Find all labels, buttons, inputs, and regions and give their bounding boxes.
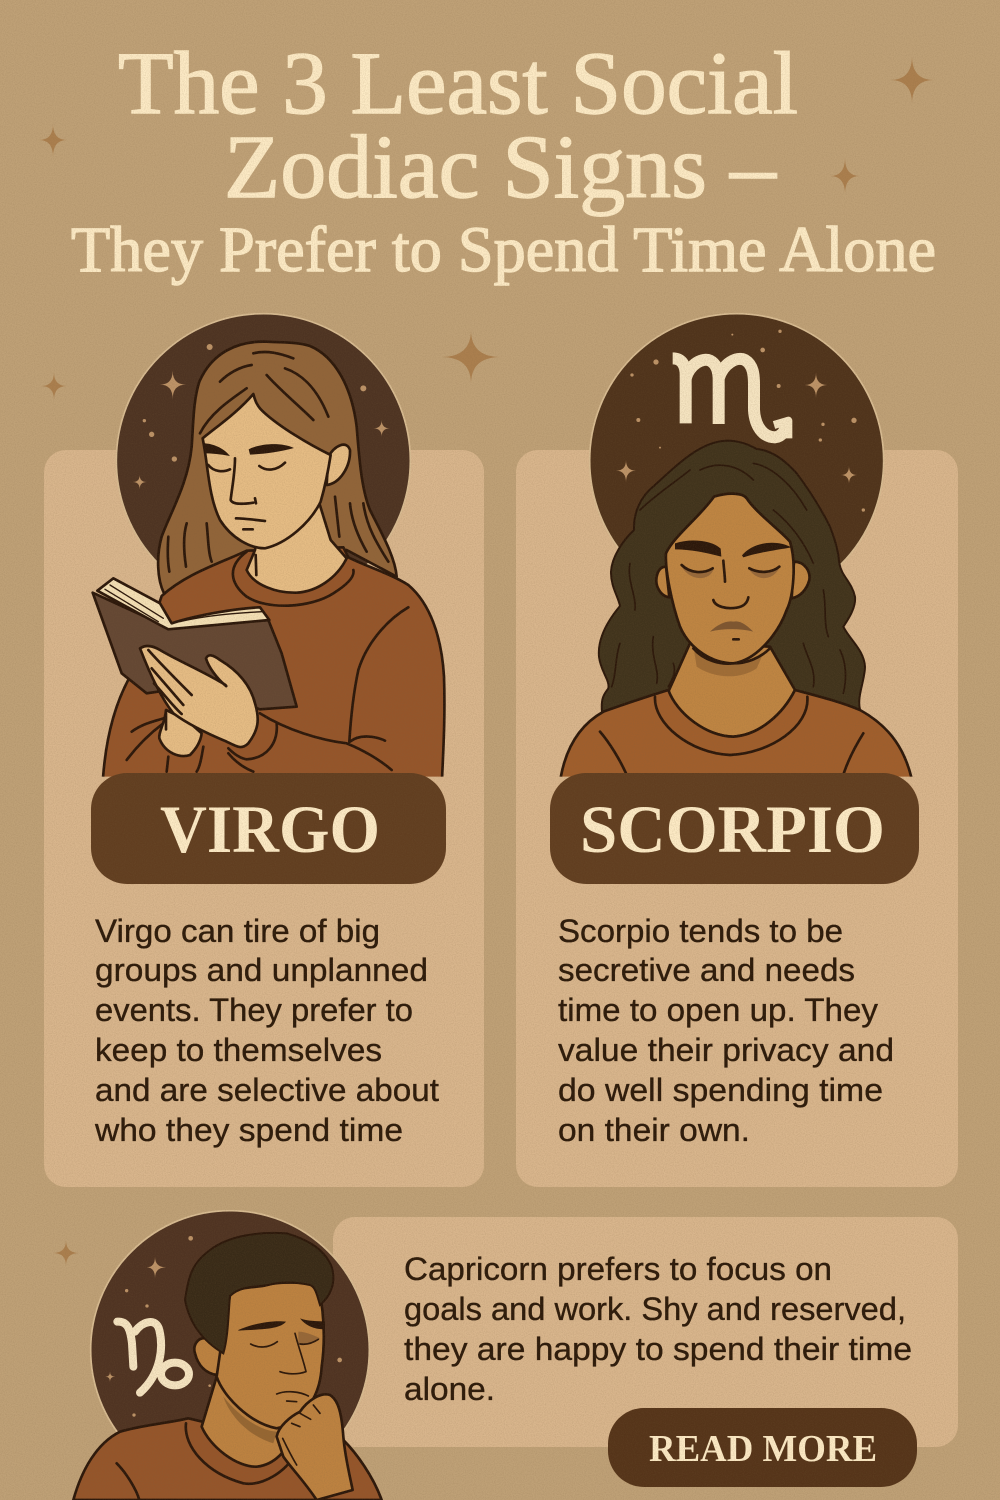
sweater [103, 547, 444, 787]
illustration: scorpio woman [559, 314, 913, 787]
text: capricorn description: goals and work. Shy and reserved, [404, 1291, 906, 1327]
text: virgo description: Virgo can tire of big [95, 913, 380, 949]
title [71, 35, 936, 286]
hair [185, 1233, 333, 1353]
text: scorpio description [558, 913, 894, 1148]
icon: capricorn symbol [117, 1322, 189, 1393]
collar [117, 1423, 293, 1500]
text: scorpio description: do well spending time [558, 1072, 883, 1108]
neck line [254, 554, 258, 576]
panel: scorpio card [516, 450, 958, 1187]
ear [327, 445, 350, 485]
illustration: virgo reading a book [93, 314, 444, 787]
face [217, 1282, 324, 1428]
title: Zodiac Signs – [224, 118, 777, 217]
text: virgo description: who they spend time [94, 1112, 403, 1148]
pill: virgo label [91, 773, 446, 884]
panel: virgo card [44, 450, 484, 1187]
neck shadow [223, 1397, 277, 1443]
text: virgo description: events. They prefer to [95, 992, 413, 1028]
eyebrows [238, 1318, 325, 1331]
book pages [97, 578, 269, 629]
hand [277, 1394, 353, 1500]
hair strands [168, 352, 388, 572]
ear [194, 1338, 223, 1375]
text: scorpio description: on their own. [558, 1112, 750, 1148]
collar [600, 697, 863, 773]
eyebrows [675, 541, 791, 557]
text: capricorn description [404, 1251, 912, 1407]
text: scorpio description: time to open up. They [558, 992, 878, 1028]
pill: scorpio label: SCORPIO [580, 791, 885, 867]
eye shadow [298, 1332, 320, 1344]
text: scorpio description: value their privacy and [558, 1032, 894, 1068]
pill: scorpio label [550, 773, 919, 884]
panel: capricorn card [333, 1217, 958, 1447]
neck [668, 643, 795, 737]
ears [656, 562, 810, 598]
text: capricorn description: alone. [404, 1371, 495, 1407]
title: The 3 Least Social [118, 35, 798, 133]
text: scorpio description: secretive and needs [558, 952, 855, 988]
pill: virgo label: VIRGO [160, 791, 380, 867]
hair strands [612, 463, 846, 693]
eyes, nose and mouth [251, 1333, 318, 1402]
button: read more [608, 1408, 917, 1487]
sweater [73, 1418, 382, 1500]
background stars [39, 56, 934, 1266]
text: virgo description: groups and unplanned [95, 952, 428, 988]
icon: scorpio symbol [673, 358, 788, 438]
button: read more: READ MORE [649, 1428, 877, 1470]
hair [599, 441, 865, 712]
neck shadow [694, 650, 763, 676]
neck [247, 500, 347, 593]
face [666, 494, 794, 663]
hair [158, 342, 397, 593]
eye shadows [682, 567, 780, 578]
collar [233, 552, 354, 606]
back hand [159, 710, 202, 756]
face [203, 394, 331, 548]
sleeve lines [127, 607, 408, 772]
neck [200, 1376, 282, 1468]
front hand [140, 646, 258, 747]
title: They Prefer to Spend Time Alone [71, 214, 936, 286]
text: scorpio description: Scorpio tends to be [558, 913, 843, 949]
text: capricorn description: they are happy to spend their time [404, 1331, 912, 1367]
text: capricorn description: Capricorn prefers to focus on [404, 1251, 832, 1287]
eyes, nose and mouth [682, 561, 779, 639]
text: virgo description: and are selective about [95, 1072, 439, 1108]
book cover [93, 593, 297, 709]
sweater [559, 690, 913, 787]
text: virgo description [94, 913, 439, 1148]
face details [204, 443, 294, 456]
illustration: capricorn man [73, 1211, 382, 1500]
text: virgo description: keep to themselves [95, 1032, 382, 1068]
